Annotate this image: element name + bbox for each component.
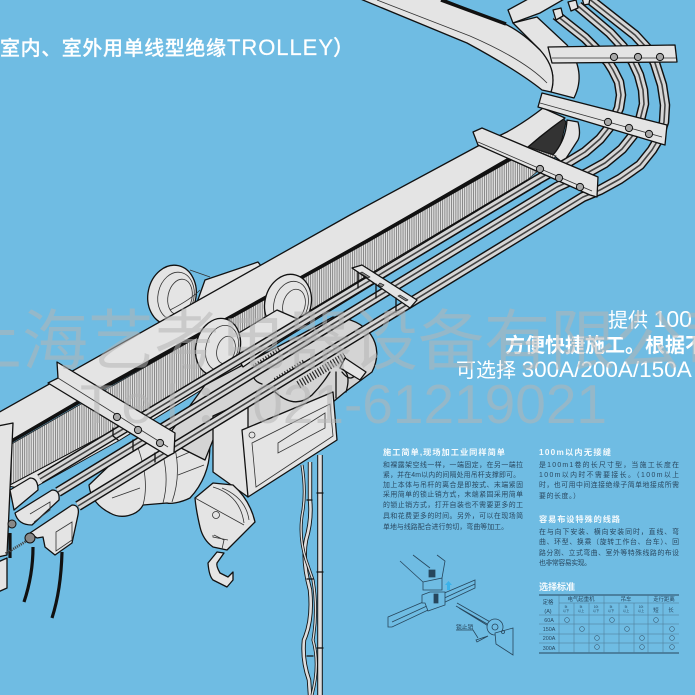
selection standards table: 以下 xyxy=(593,609,600,613)
selection standards table: 150A xyxy=(543,627,556,633)
text block: easy installation: 采用简单的锁止销方式，末端紧固采用简单 xyxy=(383,490,523,498)
selection standards table: 10t xyxy=(639,605,643,609)
selection standards table: 吊车 xyxy=(621,595,632,603)
text block: special line layouts: 曲、环型、换乘（旋转工作台、台车）、回 xyxy=(539,537,679,546)
text block: easy installation: 施工简单,现场加工业同样简单 xyxy=(383,447,505,457)
selection standards table: 电气起重机 xyxy=(568,595,595,603)
mounting bracket right xyxy=(538,93,667,145)
selection standards table: 以上 xyxy=(578,608,585,613)
selection standards table xyxy=(539,595,679,653)
blue arrow xyxy=(445,581,452,590)
large front mounting bracket xyxy=(48,362,175,462)
curved section of trolley housing xyxy=(358,0,580,163)
text block: special line layouts xyxy=(539,514,679,567)
selection standards table: 200A xyxy=(543,636,556,642)
hanging cables xyxy=(301,455,323,695)
text block: no joints within 100m: 100m以内时不需要接长。（100m以上 xyxy=(539,470,679,479)
selection standards table: 短 xyxy=(653,606,659,614)
text block: special line layouts: 在与向下安装、横向安装同时，直线、弯 xyxy=(539,527,679,536)
selection standards table: 以上 xyxy=(638,608,645,613)
text block: no joints within 100m: 是100m1卷的长尺寸型，当施工长度在 xyxy=(539,460,679,469)
selection standards table: 5t xyxy=(565,605,567,609)
selection standards table: 60A xyxy=(544,618,554,624)
title: TROLLEY xyxy=(227,35,333,60)
selection standards table: 以下 xyxy=(608,609,615,613)
text block: no joints within 100m: 时，也可用中间连接绝缘子简单地接成所需 xyxy=(539,480,679,489)
mounting bracket upper right xyxy=(548,45,677,63)
long trolley beam xyxy=(0,108,565,490)
right promotional text: 可选择 300A/200A/150A xyxy=(456,357,692,382)
electrical junction box xyxy=(213,392,337,497)
title: 室内、室外用单线型绝缘 xyxy=(0,37,226,60)
selection standards table: 10t xyxy=(594,605,598,609)
text block: no joints within 100m: 100m以内无接缝 xyxy=(539,447,611,457)
selection standards table: (A) xyxy=(544,609,552,615)
text block: easy installation: 加上本体与吊杆的离合是即按式、末端紧固 xyxy=(383,480,523,489)
black feeder cables and threaded rod xyxy=(5,520,62,618)
mounting bracket top xyxy=(508,0,566,23)
text block: no joints within 100m xyxy=(539,447,679,500)
selection standards table: 以上 xyxy=(623,608,630,613)
selection standards table: 5t xyxy=(580,605,582,609)
mounting bracket lower curve xyxy=(473,128,598,197)
company watermark: 021-61219021 xyxy=(252,373,607,435)
text block: easy installation: 和裸露架空线一样，一端固定，在另一端拉 xyxy=(383,460,523,469)
rail end connectors xyxy=(10,478,78,555)
selection table heading: 选择标准 xyxy=(539,581,575,592)
selection standards table: 以下 xyxy=(563,609,570,613)
selection standards table: 走行距离 xyxy=(653,595,675,603)
company watermark xyxy=(0,304,695,435)
text block: easy installation xyxy=(383,447,523,531)
right promotional text: 提供 100 xyxy=(608,306,692,332)
title: ） xyxy=(333,37,354,60)
hoist rear cylinder and gear mass xyxy=(165,317,377,460)
tension springs and wiring loop xyxy=(254,350,366,402)
text block: easy installation: 具和花费更多的时间。另外，可以在现场简 xyxy=(383,511,523,520)
text block: easy installation: 的锁止销方式，打开自装也不需要更多的工 xyxy=(383,500,523,509)
brush conductor cover xyxy=(8,147,556,486)
text block: no joints within 100m: 要的长度。） xyxy=(539,491,580,500)
trolley travel wheels and plate xyxy=(189,269,318,381)
left support panel xyxy=(0,423,13,592)
selection standards table: 5t xyxy=(625,605,627,609)
installation detail illustration xyxy=(388,555,513,655)
text block: easy installation: 紧，并在4m以内的间隔处用吊杆支撑即可。 xyxy=(383,470,520,479)
lower hoist motor xyxy=(89,408,210,516)
three conductor rails xyxy=(40,0,665,506)
selection standards table: 5t xyxy=(610,605,612,609)
text block: special line layouts: 路分割、立式弯曲、室外等特殊线路的布设 xyxy=(539,548,679,557)
lock pin label: 锁止销 xyxy=(456,623,474,631)
selection standards table: 300A xyxy=(543,646,556,652)
text block: special line layouts: 容易布设特殊的线路 xyxy=(539,514,621,524)
selection standards table: 定格 xyxy=(543,598,554,606)
rear drive wheel and motor behind beam xyxy=(142,261,264,329)
text block: special line layouts: 也非常容易实现。 xyxy=(539,558,591,567)
top rail connectors xyxy=(553,0,590,20)
selection standards table: 长 xyxy=(668,606,674,614)
right promotional text xyxy=(456,306,695,382)
slotted hanger bracket centre xyxy=(352,265,417,312)
company watermark: Tel： xyxy=(80,373,261,435)
hook block xyxy=(195,483,255,587)
text block: easy installation: 单地与线路配合进行剪切，弯曲等加工。 xyxy=(383,522,508,531)
